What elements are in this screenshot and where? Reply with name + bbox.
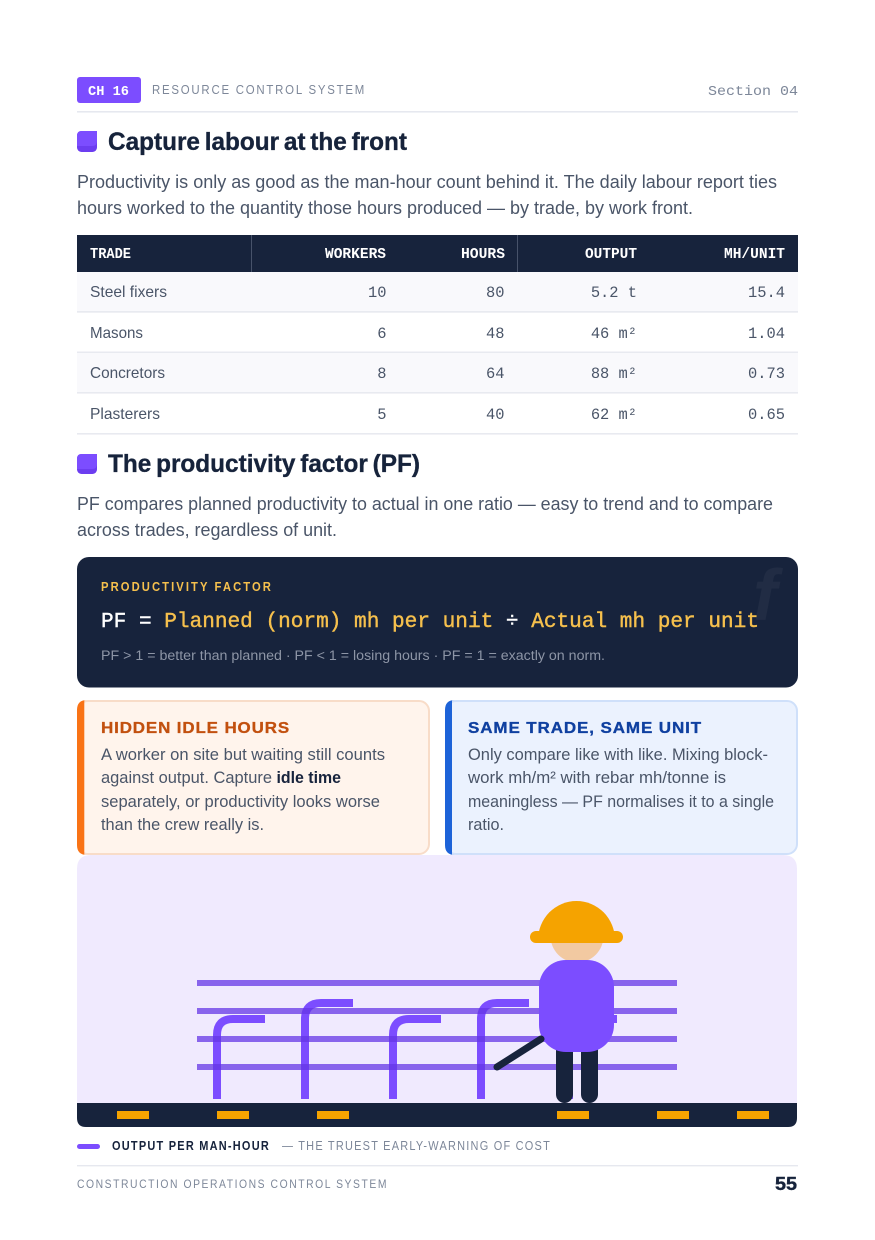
formula card <box>77 556 798 688</box>
row: masons: Masons <box>90 325 143 342</box>
callout body: idle time <box>276 768 341 787</box>
row: concretors: Concretors <box>90 365 165 382</box>
horizontal rebars <box>197 980 677 1070</box>
illustration caption <box>77 1139 551 1153</box>
formula label: PRODUCTIVITY FACTOR <box>101 579 273 594</box>
row: concretors: 8 <box>377 365 386 383</box>
callout body: separately, or productivity looks worse <box>101 792 380 811</box>
row: masons: 48 <box>486 325 504 343</box>
table header row: HOURS <box>461 247 505 263</box>
hard hat <box>530 901 623 943</box>
table header row: TRADE <box>90 247 131 263</box>
illustration: steel fixer at rebar <box>77 855 797 1127</box>
icon: heading marker <box>77 131 97 152</box>
row: masons: 6 <box>377 325 386 343</box>
row: plasterers: 5 <box>377 406 386 424</box>
row: plasterers: Plasterers <box>90 406 160 423</box>
row: plasterers: 0.65 <box>748 406 785 424</box>
intro paragraph <box>77 172 777 218</box>
callout title: HIDDEN IDLE HOURS <box>101 720 290 737</box>
page number: 55 <box>775 1173 797 1194</box>
chapter badge <box>77 77 141 103</box>
row: concretors: 88 m² <box>591 365 637 383</box>
PF paragraph: across trades, regardless of unit. <box>77 520 337 540</box>
row: steel fixers: 5.2 t <box>591 284 637 302</box>
illustration background <box>77 855 797 1110</box>
head <box>550 910 604 962</box>
intro paragraph: Productivity is only as good as the man-hour count behind it. The daily labour report ties <box>77 172 777 192</box>
worker <box>497 901 623 1103</box>
PF paragraph <box>77 494 773 540</box>
formula note: PF > 1 = better than planned · PF < 1 = losing hours · PF = 1 = exactly on norm. <box>101 648 605 664</box>
page header <box>77 77 798 113</box>
callout body: against output. Capture <box>101 768 272 787</box>
table header row: WORKERS <box>325 247 386 263</box>
intro paragraph: hours worked to the quantity those hours produced — by trade, by work front. <box>77 198 693 218</box>
illustration caption: OUTPUT PER MAN-HOUR <box>112 1139 270 1153</box>
row: steel fixers: 10 <box>368 284 386 302</box>
heading: productivity factor: The productivity factor (PF) <box>108 451 420 478</box>
icon: heading marker <box>77 454 97 474</box>
table header row: OUTPUT <box>585 247 637 263</box>
row: concretors <box>77 353 798 394</box>
ground strip <box>77 1103 797 1127</box>
heading: capture labour: Capture labour at the front <box>108 129 407 156</box>
row: concretors: 64 <box>486 365 504 383</box>
ghost f glyph: f <box>753 556 783 636</box>
legs <box>556 1040 598 1103</box>
row: plasterers: 40 <box>486 406 504 424</box>
callout: hidden idle hours <box>77 700 429 855</box>
running title: RESOURCE CONTROL SYSTEM <box>152 82 366 97</box>
callout body <box>101 745 385 834</box>
row: steel fixers: Steel fixers <box>90 284 167 301</box>
chapter badge: CH 16 <box>88 84 129 100</box>
callout: same trade, same unit <box>445 700 797 855</box>
row: plasterers: 62 m² <box>591 406 637 424</box>
row: masons <box>77 325 798 353</box>
callout title: SAME TRADE, SAME UNIT <box>468 720 702 737</box>
footer title: CONSTRUCTION OPERATIONS CONTROL SYSTEM <box>77 1177 388 1191</box>
vertical rebars with hooks <box>217 1003 617 1099</box>
table header row <box>77 235 798 272</box>
torso <box>539 960 614 1052</box>
page footer <box>77 1165 798 1194</box>
row: steel fixers: 15.4 <box>748 284 785 302</box>
callout body: Only compare like with like. Mixing block- <box>468 745 768 764</box>
section label: Section 04 <box>708 84 798 100</box>
ground markers <box>117 1111 769 1119</box>
illustration caption: — THE TRUEST EARLY-WARNING OF COST <box>282 1139 551 1153</box>
callout body: meaningless — PF normalises it to a single <box>468 792 774 811</box>
row: steel fixers <box>77 272 798 313</box>
row: plasterers <box>77 406 798 435</box>
formula: PF = Planned (norm) mh per unit ÷ Actual mh per unit <box>101 610 759 634</box>
row: masons: 1.04 <box>748 325 785 343</box>
row: masons: 46 m² <box>591 325 637 343</box>
callout body: ratio. <box>468 815 504 834</box>
row: concretors: 0.73 <box>748 365 785 383</box>
callout body: A worker on site but waiting still counts <box>101 745 385 764</box>
labour report table <box>77 235 798 435</box>
callout body: work mh/m² with rebar mh/tonne is <box>467 768 726 787</box>
caption marker <box>77 1144 100 1149</box>
PF paragraph: PF compares planned productivity to actual in one ratio — easy to trend and to compare <box>77 494 773 514</box>
arm tool <box>497 1039 541 1067</box>
table header row: MH/UNIT <box>724 247 785 263</box>
callout body: than the crew really is. <box>101 815 264 834</box>
callout body <box>467 745 774 834</box>
row: steel fixers: 80 <box>486 284 504 302</box>
